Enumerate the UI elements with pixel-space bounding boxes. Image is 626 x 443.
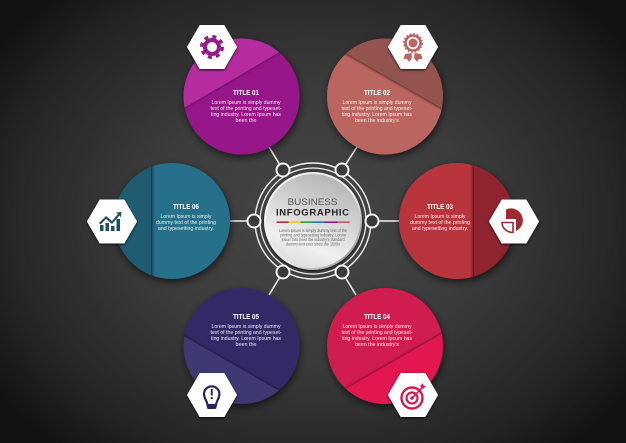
text: title 01 body: been the: [236, 118, 257, 124]
text: title 06 body: Lorem Ipsum is simply: [160, 214, 212, 220]
heading: title 06: TITLE 06: [173, 204, 199, 211]
text: title 05 body: text of the printing and typeset-: [210, 330, 282, 336]
heading: title 04: TITLE 04: [364, 314, 390, 321]
text: title 04 body: Lorem Ipsum is simply dummy: [342, 324, 412, 330]
text: title 04 body: text of the printing and typeset-: [342, 330, 413, 336]
icon: award hexagon: [388, 26, 438, 68]
text: central description: Ipsum has been the industry's standard: [282, 237, 345, 242]
text: central description: [279, 228, 348, 246]
text: title 03 body: [410, 214, 470, 232]
heading: business: BUSINESS: [288, 197, 338, 208]
icon: growth chart hexagon: [88, 200, 136, 243]
heading: title 05: TITLE 05: [233, 314, 259, 321]
text: title 02 body: been the industry's: [355, 118, 399, 124]
icon: pie chart hexagon: [490, 200, 538, 243]
heading: title 01: TITLE 01: [233, 90, 259, 97]
node circles: [248, 164, 378, 278]
text: central description: dummy text ever since the 1500s: [286, 242, 340, 246]
icon: gear hexagon: [188, 26, 236, 68]
central hub rings: [255, 163, 371, 279]
connector lines: [226, 147, 400, 295]
text: title 05 body: [210, 324, 282, 348]
text: title 02 body: text of the printing and typeset-: [342, 106, 413, 112]
rainbow divider: [276, 221, 350, 223]
text: title 06 body: dummy text of the printing: [156, 220, 216, 226]
text: title 01 body: [210, 100, 282, 124]
text: title 03 body: Lorem Ipsum is simply: [414, 214, 466, 220]
text: title 03 body: dummy text of the printing: [410, 220, 470, 226]
text: central description: Lorem Ipsum is simply dummy text of the: [279, 228, 348, 233]
text: title 05 body: been the: [236, 342, 257, 348]
text: title 06 body: and typesetting industry.: [158, 226, 214, 232]
panel: title 02 circle: [326, 38, 446, 160]
text: title 02 body: Lorem Ipsum is simply dummy: [342, 100, 412, 106]
icon: target hexagon: [388, 374, 438, 416]
central silver disc: [264, 172, 362, 270]
text: title 04 body: [342, 324, 413, 348]
text: title 04 body: been the industry's: [355, 342, 399, 348]
text: title 01 body: Lorem Ipsum is simply dummy: [212, 100, 281, 106]
text: title 02 body: ting industry. Lorem Ipsum has: [342, 112, 412, 118]
text: title 01 body: ting industry. Lorem Ipsum has: [211, 112, 281, 118]
text: central description: printing and typesetting industry. Lorem: [280, 232, 347, 238]
text: title 01 body: text of the printing and typeset-: [210, 106, 282, 112]
text: title 05 body: Lorem Ipsum is simply dummy: [212, 324, 281, 330]
heading: title 03: TITLE 03: [427, 204, 453, 211]
text: title 06 body: [156, 214, 216, 232]
heading: infographic: INFOGRAPHIC: [276, 208, 349, 218]
icon: lightbulb hexagon: [188, 374, 236, 416]
text: title 05 body: ting industry. Lorem Ipsum has: [211, 336, 281, 342]
text: title 03 body: and typesetting industry.: [412, 226, 468, 232]
panel: title 01 circle: [182, 38, 303, 160]
text: title 02 body: [342, 100, 413, 124]
panel: title 04 circle: [327, 288, 450, 410]
panel: title 05 circle: [175, 288, 300, 410]
heading: title 02: TITLE 02: [364, 90, 390, 97]
panel: title 06 circle: [104, 160, 230, 285]
text: title 04 body: ting industry. Lorem Ipsum has: [342, 336, 412, 342]
panel: title 03 circle: [399, 160, 524, 285]
